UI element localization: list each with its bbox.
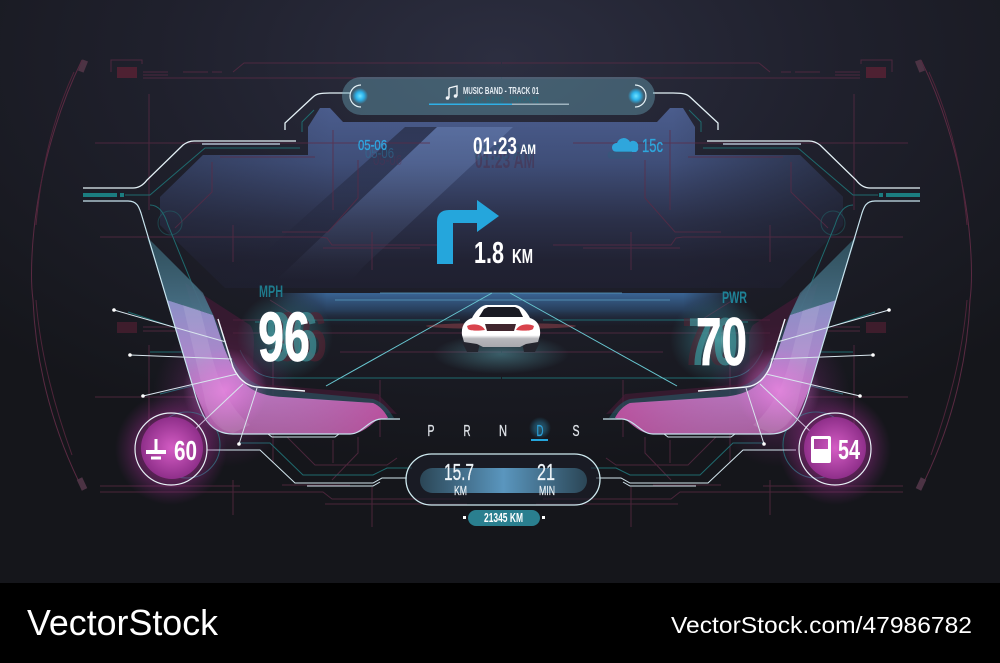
body	[462, 305, 540, 347]
gear selector: S	[572, 423, 580, 440]
dark diagonal band	[225, 127, 437, 288]
ghost red: 96	[275, 298, 327, 376]
left indicator light	[352, 88, 368, 104]
gauge glow	[115, 393, 227, 505]
track title: MUSIC BAND - TRACK 01	[463, 86, 539, 97]
rear panel	[485, 324, 516, 331]
navigation distance: 1.8	[474, 235, 504, 270]
watermark bar	[0, 583, 1000, 663]
speed unit: MPH	[259, 282, 283, 301]
date: 05-06	[358, 137, 387, 154]
speed readout	[237, 282, 333, 380]
trip computer: KM	[454, 483, 467, 498]
navigation distance: KM	[512, 246, 533, 268]
road band	[274, 292, 734, 322]
right indicator light	[628, 88, 644, 104]
gauge value: 54	[838, 434, 860, 465]
fuel gauge left	[115, 393, 227, 505]
gear selector: P	[428, 423, 434, 440]
car shadow	[433, 334, 569, 374]
icon: navigation turn arrow	[437, 200, 499, 264]
gear selector: D	[536, 423, 544, 440]
icon: cloud	[612, 138, 638, 152]
gauge glow	[779, 393, 891, 505]
music player	[342, 77, 655, 115]
speed glow	[237, 292, 333, 380]
gauge ring	[135, 413, 207, 485]
progress fill	[429, 104, 512, 105]
gauge ring	[799, 413, 871, 485]
gear selector	[428, 417, 580, 441]
windshield screen panel	[160, 108, 843, 288]
ghost cloud	[607, 151, 632, 159]
indicator brackets	[350, 85, 646, 107]
ghost teal: 70	[688, 304, 738, 380]
gauge disc	[804, 417, 866, 479]
clock: 01:23 AM	[475, 147, 535, 173]
trip computer	[406, 454, 600, 505]
icon: ground symbol	[146, 439, 166, 460]
left dashboard wing	[32, 59, 501, 527]
clock: 01:23 AM	[474, 139, 534, 165]
power unit: PWR	[722, 288, 747, 307]
power glow	[670, 296, 766, 384]
ghost track text: MUSIC BAND - TRACK 01	[465, 95, 539, 105]
tail lights	[467, 324, 534, 331]
clock: 01:23	[473, 133, 517, 160]
light diagonal band	[268, 127, 513, 288]
right dashboard wing	[502, 59, 972, 527]
icon: battery	[811, 436, 831, 463]
gear selector: R	[464, 423, 470, 440]
trip computer: MIN	[539, 483, 555, 498]
gear selector: N	[499, 423, 507, 440]
date: 05-06	[373, 152, 402, 169]
car	[426, 305, 576, 374]
power readout	[670, 288, 766, 384]
odometer: 21345 KM	[484, 511, 523, 525]
road perspective lines	[326, 293, 677, 386]
wheels	[462, 342, 540, 352]
progress track	[429, 104, 569, 105]
battery gauge right	[779, 393, 891, 505]
power value: 70	[696, 304, 747, 380]
temperature: 15c	[642, 136, 663, 156]
watermark url: VectorStock.com/47986782	[671, 612, 972, 638]
icon: music note	[449, 86, 457, 98]
odometer	[463, 510, 545, 526]
clock	[473, 133, 536, 173]
clock: AM	[520, 141, 536, 157]
ghost red: 70	[682, 304, 732, 380]
gauge value: 60	[174, 435, 197, 466]
tail glow	[426, 323, 576, 329]
ghost teal: 96	[266, 298, 318, 376]
trip time: 21	[537, 459, 555, 485]
gauge disc	[141, 417, 203, 479]
date: 05-06	[365, 145, 394, 162]
date	[358, 137, 402, 169]
weather	[607, 136, 663, 159]
trip distance: 15.7	[444, 459, 474, 485]
rear window	[479, 307, 523, 317]
watermark logo: VectorStock	[27, 602, 219, 643]
speed value: 96	[258, 298, 310, 376]
